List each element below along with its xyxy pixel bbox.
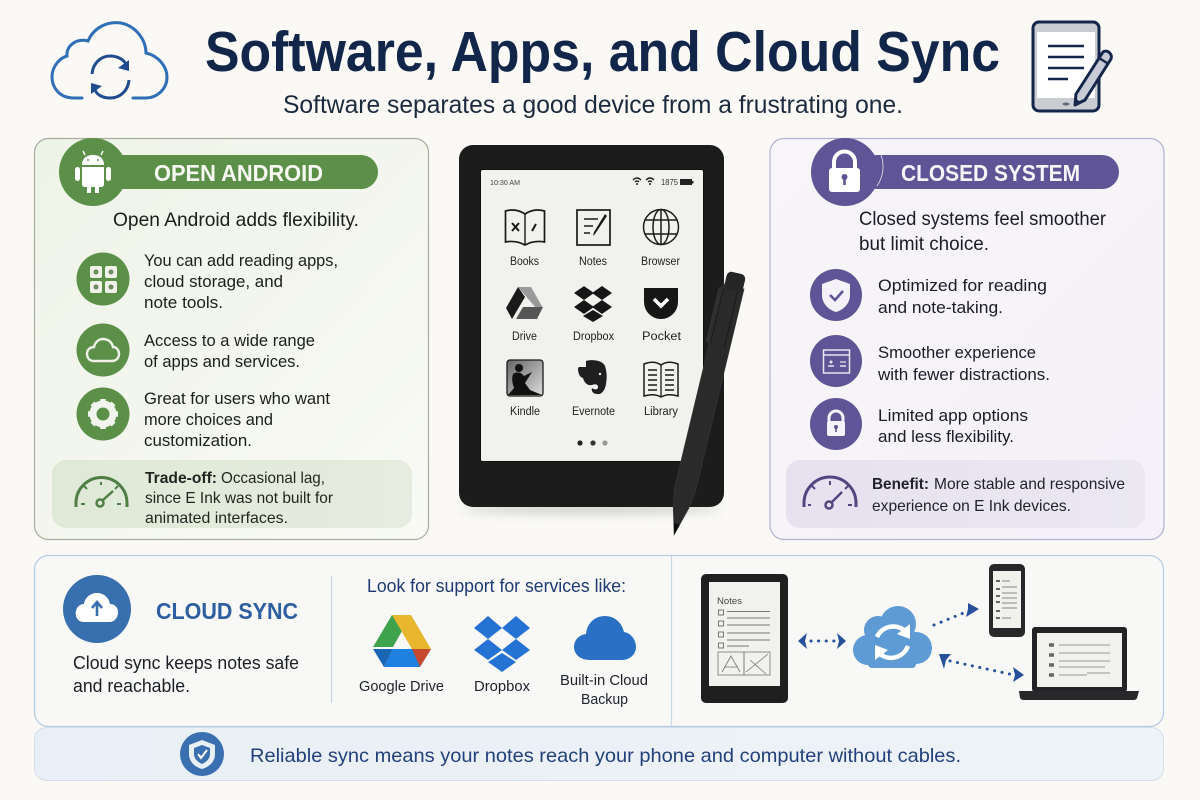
panel lead text: Closed systems feel smoother [859,208,1106,230]
app icon: books: Books [510,256,539,268]
panel: cloud sync [34,556,1164,726]
callout: trade-off: Trade-off: [145,470,217,487]
text: cloud sync description [73,653,299,696]
app icon: dropbox: Dropbox [573,331,614,343]
text: cloud sync description: Cloud sync keeps notes safe [73,653,299,673]
title: Software, Apps, and Cloud Sync [205,20,1000,84]
app icon: drive: Drive [512,331,537,343]
app icon: kindle [507,360,543,418]
app icon: notes [577,210,610,268]
arrow: e-reader to cloud [798,633,846,649]
item: reading apps: You can add reading apps, [144,251,338,270]
header pill: open android [105,155,378,189]
status bar: 1875 [661,178,679,187]
item: smoother experience [810,335,1050,387]
item: optimized [810,269,1047,321]
item: optimized: and note-taking. [878,298,1003,317]
status bar: 10:30 AM [490,178,520,187]
item: customization: Great for users who want [144,389,330,408]
app icon: pocket [642,288,682,343]
app icon: library [644,362,678,418]
page dots [577,440,608,446]
header pill: closed system [860,155,1119,189]
icon: cloud sync outline [52,23,167,98]
app icon: pocket: Pocket [642,331,682,343]
icon: tablet with pen [1033,22,1111,111]
item: wide range of apps: Access to a wide range [144,331,315,350]
device: laptop [1019,627,1139,700]
heading: cloud sync: CLOUD SYNC [156,598,298,624]
header pill: open android: OPEN ANDROID [154,160,323,186]
item: reading apps: note tools. [144,293,223,312]
callout: trade-off: Occasional lag, [221,470,325,487]
app icon: notes: Notes [579,256,607,268]
item: wide range of apps [76,324,315,376]
icon: dropbox [474,616,531,695]
device: e-reader with notes: Notes [717,596,742,607]
banner: reliable sync: Reliable sync means your notes reach your phone and computer without cables. [250,745,961,767]
e-reader device [459,145,724,514]
app icon: library: Library [644,406,678,418]
item: limited options [810,398,1028,450]
app icon: evernote [572,360,615,418]
app icon: browser: Browser [641,256,680,268]
icon: built-in cloud backup: Backup [581,692,628,708]
item: smoother experience: Smoother experience [878,343,1036,362]
panel lead text [859,208,1106,255]
icon: gauge [76,478,127,507]
callout: benefit: Benefit: [872,476,929,493]
panel: open android [34,138,428,540]
app icon: books [506,210,544,268]
item: wide range of apps: of apps and services. [144,352,300,371]
text: services heading: Look for support for services like: [367,576,626,596]
icon: android [59,138,127,206]
app icon: evernote: Evernote [572,406,615,418]
arrow: cloud to phone [934,603,979,625]
item: customization: more choices and [144,410,273,429]
icon: built-in cloud backup [560,616,648,708]
banner: reliable sync [34,728,1164,780]
icon: gauge [804,477,856,508]
header pill: closed system: CLOSED SYSTEM [901,160,1080,186]
icon: built-in cloud backup: Built-in Cloud [560,673,648,689]
callout: trade-off: since E Ink was not built for [145,490,333,507]
stylus pen [661,270,747,537]
callout: benefit: experience on E Ink devices. [872,498,1071,515]
app icon: drive [506,287,543,343]
callout: trade-off: animated interfaces. [145,510,288,527]
arrow: cloud to laptop [939,654,1024,682]
icon: google drive: Google Drive [359,679,444,695]
panel lead text: but limit choice. [859,233,989,255]
item: customization [76,388,330,450]
icon: shield [180,732,224,776]
item: limited options: and less flexibility. [878,427,1014,446]
item: limited options: Limited app options [878,406,1028,425]
status bar [490,178,694,187]
callout: trade-off [52,460,412,528]
item: reading apps [76,251,338,312]
panel: closed system [770,138,1164,540]
item: optimized: Optimized for reading [878,276,1047,295]
icon: google drive [359,615,444,695]
subtitle: Software separates a good device from a frustrating one. [283,91,903,119]
screen [480,170,704,462]
item: customization: customization. [144,431,252,450]
device: e-reader with notes [701,574,788,703]
icon: cloud upload [63,575,131,643]
callout: benefit [786,460,1145,528]
callout: benefit: More stable and responsive [934,476,1125,493]
icon: sync cloud [853,606,932,668]
device: phone [989,564,1025,637]
item: reading apps: cloud storage, and [144,272,283,291]
item: smoother experience: with fewer distractions. [877,365,1050,384]
app icon: kindle: Kindle [510,406,540,418]
panel lead text: Open Android adds flexibility. [113,209,359,231]
app icon: dropbox [573,286,614,343]
text: cloud sync description: and reachable. [73,676,190,696]
icon: padlock [811,138,883,206]
app icon: browser [641,210,680,268]
icon: dropbox: Dropbox [474,679,531,695]
